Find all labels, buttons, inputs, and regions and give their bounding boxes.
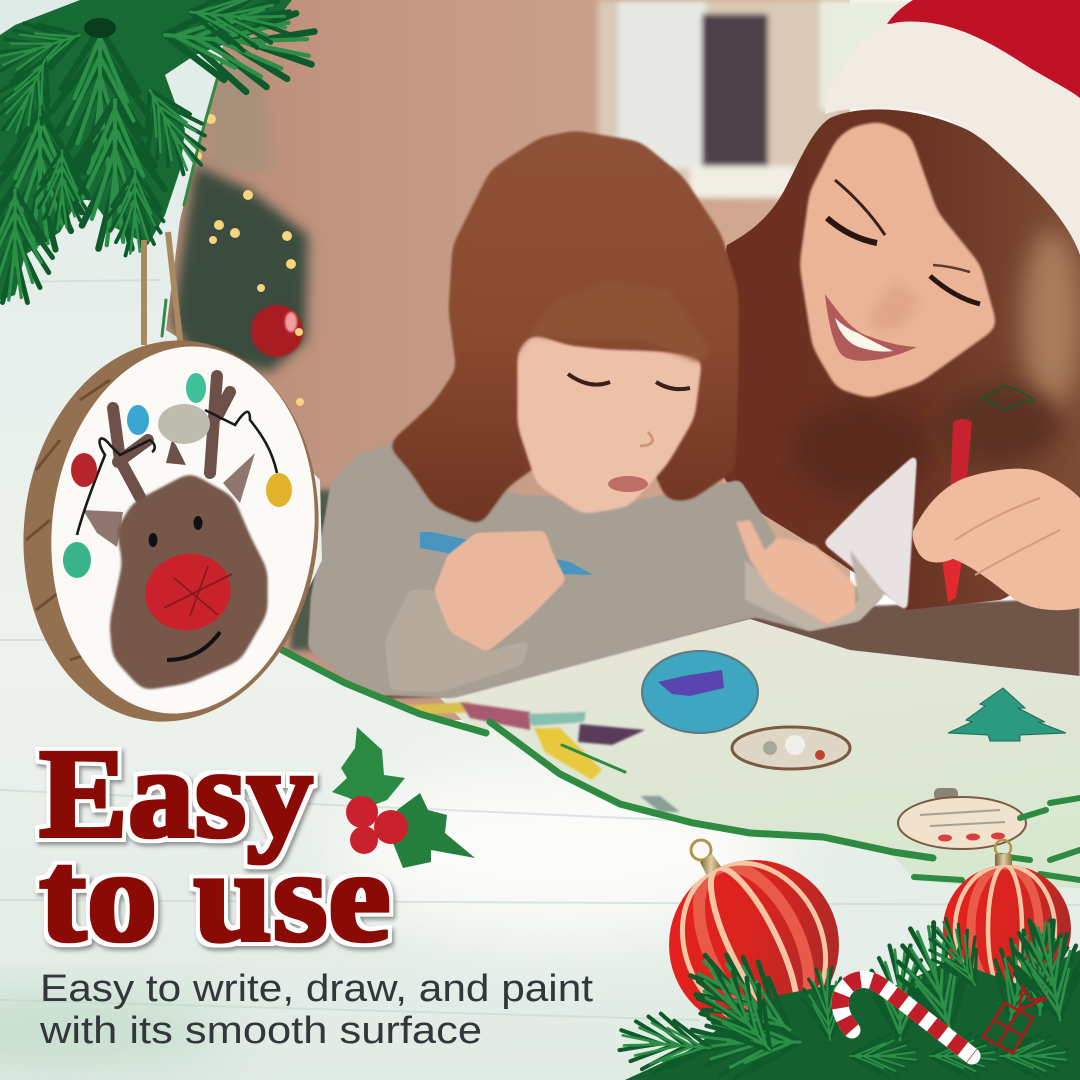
mother finger lines [955,498,1060,575]
child face [518,334,702,514]
child eyes and mouth [568,374,690,492]
mother hand [913,469,1080,610]
pine branch top left [0,0,317,302]
photo wood table [360,598,1080,700]
bell [158,404,210,444]
santa hat [825,0,1080,255]
mother hair highlights and shadows [790,230,1080,500]
twine [144,232,184,395]
holly leaves and berries [332,727,475,868]
bright patch of wood [340,760,780,940]
child hand with crayon [434,531,566,652]
child sweater [308,438,885,698]
green corner wash [0,1000,230,1060]
antlers [113,376,230,497]
child hair [388,131,738,525]
blue crayon [420,532,593,575]
light string [77,410,277,535]
red crayon [942,419,972,602]
green torn edge strokes [162,62,1080,880]
mother face [800,122,997,398]
reindeer ears [83,453,255,547]
red nose [138,546,238,638]
holly outline on hair [982,386,1034,410]
child right cuff [745,550,885,631]
wood slice reindeer ornament [5,232,337,736]
child left cuff [385,590,530,692]
mother white top [823,453,917,612]
craft: green tree [948,688,1066,741]
pine branch bottom right [618,911,1080,1080]
heading: Easy to use: Easy [39,724,313,864]
photo christmas tree [172,60,308,406]
subheading text: Easy to write, draw, and paint [40,968,593,1010]
child right hand [736,520,855,625]
red bauble right [943,840,1071,993]
mother nose shadow [868,280,920,332]
child fringe [505,280,712,370]
craft: message ornament [898,788,1026,849]
candy cane [840,980,972,1056]
coloured bulbs [63,373,292,578]
mother hair [717,109,1080,610]
bark rim [5,326,337,736]
subheading text: with its smooth surface [39,1010,482,1052]
craft: blue round ornament [642,651,758,733]
heading: Easy to use: to use [39,825,391,969]
dark hub of top branch [84,18,116,38]
subheading text [39,968,593,1052]
gift icon outline [983,987,1047,1053]
eyes and smile [148,516,220,660]
antler centre [166,440,186,465]
photo: mother and child colouring at a table [150,0,1080,900]
white face of slice [33,333,333,727]
red bauble left [669,838,839,1020]
mother eyes and smile [825,180,980,361]
photo white paper on table [440,619,1080,900]
reindeer head [110,473,267,690]
photo bookshelf [598,0,920,199]
heading: Easy to use [39,724,391,969]
bark texture [26,380,110,660]
scattered crayons and craft pieces [390,702,680,812]
craft: round ornament [732,727,850,769]
photo wall [150,0,850,720]
dark shadow between ornament and sweater [290,490,335,650]
